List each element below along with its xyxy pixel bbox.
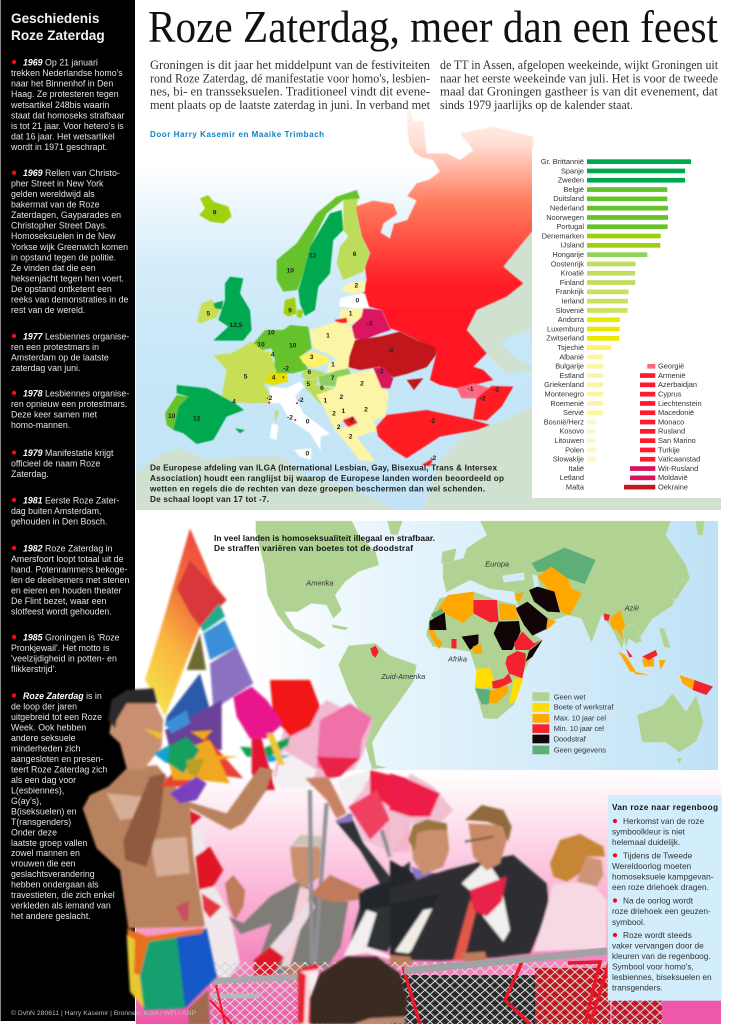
sidebar heading: Roze Zaterdag xyxy=(11,28,105,43)
sidebar: history timeline xyxy=(0,0,135,1021)
country labels left: Italië xyxy=(568,464,584,473)
country scores: 2 xyxy=(339,394,343,401)
country labels left: IJsland xyxy=(561,241,584,250)
timeline entry Roze Zaterdag: andere seksuele xyxy=(11,733,76,743)
timeline entry 1969 Binnenhof xyxy=(10,58,125,152)
country scores: -2 xyxy=(430,455,437,462)
bullet WW2 triangle: Wereldoorlog moeten xyxy=(612,861,692,871)
country labels left: Zwitserland xyxy=(546,334,584,343)
country scores: 3 xyxy=(310,354,314,361)
country scores: 1 xyxy=(326,332,330,339)
continent labels xyxy=(305,560,639,681)
timeline entry Roze Zaterdag: als een dag voor xyxy=(11,775,76,785)
country labels right: Vaticaanstad xyxy=(658,455,700,464)
continent labels: Zuid-Amerika xyxy=(380,672,425,681)
country labels left: Luxemburg xyxy=(547,324,584,333)
timeline entry Roze Zaterdag: geslachtsverandering xyxy=(11,869,95,879)
country scores: -2 xyxy=(493,386,500,393)
timeline entry Roze Zaterdag: G(ay's), xyxy=(11,796,42,806)
timeline entry 1969 Christopher Street: Homoseksuelen in de New xyxy=(11,231,116,241)
country scores: 0 xyxy=(306,418,310,425)
bullet after the war: symbool. xyxy=(612,917,645,927)
panel: Europe map xyxy=(136,107,721,510)
intro text: nes, bi- en transseksuelen. Traditioneel vindt dit evene- xyxy=(150,85,430,99)
country scores xyxy=(168,209,500,462)
timeline entry Roze Zaterdag: L(esbiennes), xyxy=(11,785,64,795)
timeline entry 1982: len de deelnemers met stenen xyxy=(11,575,129,585)
country scores: 10 xyxy=(287,268,294,275)
timeline entry Roze Zaterdag: Onder deze xyxy=(11,827,57,837)
timeline entry Roze Zaterdag: B(iseksuelen) en xyxy=(11,806,77,816)
country labels left: Noorwegen xyxy=(546,213,584,222)
timeline entry Roze Zaterdag: minderheden zich xyxy=(11,743,81,753)
country labels right: Azerbaidjan xyxy=(658,380,697,389)
country scores: 6 xyxy=(307,369,311,376)
timeline entry 1969 Christopher Street: in opstand tegen de politie. xyxy=(11,252,116,262)
photo: rainbow flag xyxy=(145,528,253,750)
timeline entry 1969 Binnenhof: naar het Binnenhof in Den xyxy=(11,79,113,89)
country labels right: Rusland xyxy=(658,427,685,436)
photo background gradient xyxy=(136,772,721,1024)
timeline entry 1978: Deze keer samen met xyxy=(11,410,98,420)
intro text: naar het eerste weekeinde van juli. Het is voor de tweede xyxy=(440,71,718,85)
panel: country ranking bar chart xyxy=(532,147,721,510)
country scores: 5 xyxy=(306,381,310,388)
timeline entry 1979: 1979 Manifestatie krijgt xyxy=(23,448,114,458)
timeline entry 1969 Christopher Street: reeks van demonstraties in de xyxy=(11,294,128,304)
country labels left: Bulgarije xyxy=(555,362,584,371)
bullet rainbow xyxy=(612,930,712,993)
timeline entry 1985: Pronkjewail'. Het motto is xyxy=(11,643,110,653)
bullet origin of pink xyxy=(612,816,705,847)
country scores: 6 xyxy=(353,251,357,258)
timeline entry 1985: 'veelzijdigheid in potten- en xyxy=(11,654,117,664)
world sea background xyxy=(255,521,718,770)
timeline entry 1978 xyxy=(11,388,129,430)
country scores: 10 xyxy=(168,413,176,420)
legend: Max. 10 jaar cel xyxy=(554,714,606,723)
bullet after the war xyxy=(612,896,711,927)
country labels right: Liechtenstein xyxy=(658,399,702,408)
country labels left: Kosovo xyxy=(559,427,584,436)
timeline entry Roze Zaterdag: Week. Ook hebben xyxy=(11,722,86,732)
timeline entry 1969 Binnenhof: wordt in 1971 geschrapt. xyxy=(10,142,107,152)
country scores: -2 xyxy=(266,395,273,402)
bullet rainbow: lesbiennes, biseksuelen en xyxy=(612,972,712,982)
country labels left: Hongarije xyxy=(552,250,584,259)
sidebar heading: Geschiedenis xyxy=(11,11,99,26)
bullet WW2 triangle: een roze driehoek dragen. xyxy=(612,882,709,892)
country labels left: Slowakije xyxy=(553,455,584,464)
country labels left: Ierland xyxy=(561,296,584,306)
country scores: 2 xyxy=(354,283,358,290)
timeline entry 1969 Christopher Street: gelden wereldwijd als xyxy=(11,189,95,199)
world map heading: In veel landen is homoseksualiteit illegaal en strafbaar. xyxy=(214,533,435,543)
country scores: 4 xyxy=(272,374,276,381)
bullet after the war: Na de oorlog wordt xyxy=(623,896,694,906)
country labels left: Bosnië/Herz xyxy=(544,417,584,426)
timeline entry 1979: Zaterdag. xyxy=(11,469,49,479)
country scores: 5 xyxy=(206,311,210,318)
country scores: 12 xyxy=(309,252,317,259)
country scores: 1 xyxy=(341,408,345,415)
country scores: 12,5 xyxy=(230,322,243,329)
country labels right: San Marino xyxy=(658,436,696,445)
intro text xyxy=(150,58,719,112)
timeline entry 1969 Christopher Street: Christopher Street Days. xyxy=(11,221,107,231)
timeline entry 1969 Binnenhof: Haag. Ze protesteren tegen xyxy=(11,89,119,99)
country labels left: Andorra xyxy=(558,315,585,324)
country labels right: Georgië xyxy=(658,362,684,371)
timeline entry 1981: 1981 Eerste Roze Zater- xyxy=(23,495,119,505)
country scores: 4 xyxy=(271,351,275,358)
country labels right: Turkije xyxy=(658,445,680,454)
world map heading: De straffen variëren van boetes tot de doodstraf xyxy=(214,543,413,553)
negative score bars xyxy=(624,364,655,490)
country labels right: Wit-Rusland xyxy=(658,464,698,473)
timeline entry 1969 Binnenhof: trekken Nederlandse homo's xyxy=(11,68,123,78)
country labels left: Zweden xyxy=(558,176,584,185)
timeline entry 1969 Christopher Street xyxy=(11,168,128,315)
country labels left: Frankrijk xyxy=(556,287,584,296)
timeline entry 1978: homo-mannen. xyxy=(11,420,70,430)
country scores: -2 xyxy=(287,414,293,421)
photo: parade bouquets xyxy=(188,680,410,980)
timeline entry 1969 Christopher Street: 1969 Rellen van Christo- xyxy=(23,168,120,178)
timeline entry 1969 Christopher Street: De opstand ontketent een xyxy=(11,284,112,294)
country scores: 10 xyxy=(257,341,265,348)
intro text: sinds 1979 jaarlijks op de kalender staat. xyxy=(440,98,633,112)
timeline entry 1969 Binnenhof: wetsartikel 248bis waarin xyxy=(10,100,109,110)
countries by penalty xyxy=(370,548,713,704)
positive score bars xyxy=(587,159,691,462)
country scores: 12 xyxy=(193,415,201,422)
bullet origin of pink: Herkomst van de roze xyxy=(623,816,705,826)
continent labels: Europa xyxy=(485,560,509,569)
country labels left: Malta xyxy=(566,482,585,492)
timeline entry 1982: De Flint bezet, waar een xyxy=(11,596,106,606)
timeline entry 1977: zaterdag van juni. xyxy=(11,363,80,373)
timeline entry 1969 Christopher Street: rest van de wereld. xyxy=(11,305,85,315)
country scores: 2 xyxy=(337,424,341,431)
photo: man with rainbow flag and feather bouquet xyxy=(83,688,273,1024)
photo: fence with net and ribbons xyxy=(210,951,721,1024)
legend: Min. 10 jaar cel xyxy=(554,724,604,733)
timeline entry Roze Zaterdag: verkleden als iemand van xyxy=(11,901,111,911)
credits footer: © DvhN 280611 | Harry Kasemir | Bronnen: ILGA / WFI / ANP xyxy=(11,1009,196,1017)
panel heading: Van roze naar regenboog xyxy=(612,803,718,812)
timeline entry 1978: 1978 Lesbiennes organise- xyxy=(23,388,129,398)
timeline entry Roze Zaterdag: aangesloten en presen- xyxy=(11,754,104,764)
country labels left: Spanje xyxy=(561,166,584,175)
country scores: 9 xyxy=(288,307,292,314)
bullet WW2 triangle: Tijdens de Tweede xyxy=(623,850,693,860)
country labels left: Tsjechië xyxy=(557,343,584,352)
country scores: 1 xyxy=(323,398,327,405)
Europe map caption: Association) houdt een ranglijst bij waarop de Europese landen worden beoordeeld op xyxy=(150,474,504,483)
timeline entry 1979: officieel de naam Roze xyxy=(11,458,100,468)
timeline entry 1977 xyxy=(11,332,129,373)
byline: Door Harry Kasemir en Maaike Trimbach xyxy=(150,130,324,139)
continent labels: Amerika xyxy=(305,578,333,587)
timeline entry Roze Zaterdag: vrouwen die een xyxy=(11,859,76,869)
timeline entry 1981: dag buiten Amsterdam, xyxy=(11,506,101,516)
bullet rainbow: vaker vervangen door de xyxy=(612,941,704,951)
Europe map caption: De Europese afdeling van ILGA (International Lesbian, Gay, Bisexual, Trans & Intersex xyxy=(150,464,497,472)
country scores: 10 xyxy=(267,329,275,336)
continent labels: Azië xyxy=(624,603,639,612)
country labels left: Servië xyxy=(563,408,584,417)
intro text: Groningen is dit jaar het middelpunt van de festiviteiten xyxy=(150,58,430,72)
timeline entry 1981: gehouden in Den Bosch. xyxy=(11,516,107,526)
country labels right: Cyprus xyxy=(658,390,682,398)
timeline entry 1981 xyxy=(11,495,119,526)
timeline entry 1982: en eieren en houden theater xyxy=(11,586,122,596)
timeline entry 1982 xyxy=(11,543,129,616)
timeline entry 1985: 1985 Groningen is 'Roze xyxy=(23,632,120,642)
timeline entry 1985 xyxy=(11,632,120,674)
legend: Boete of werkstraf xyxy=(554,703,614,712)
timeline entry Roze Zaterdag: travestieten, die zich enkel xyxy=(11,890,115,900)
world map heading xyxy=(214,533,435,553)
country labels left: Duitsland xyxy=(553,194,584,203)
map of Europe with scores xyxy=(136,107,533,510)
timeline entry 1969 Binnenhof: dat 16 jaar. Het wetsartikel xyxy=(11,132,115,142)
country scores: 2 xyxy=(360,381,364,388)
intro text: de TT in Assen, afgelopen weekeinde, wijkt Groningen uit xyxy=(440,58,719,72)
timeline entry 1969 Christopher Street: Zaterdagen, Gayparades en xyxy=(11,210,121,220)
intro text: ment plaats op de laatste zaterdag in juni. In verband met xyxy=(150,98,431,112)
country labels left: Finland xyxy=(560,278,584,287)
bullet rainbow: Roze wordt steeds xyxy=(623,930,692,940)
country labels left: Slovenië xyxy=(556,306,584,315)
timeline entry 1977: ren een protestmars in xyxy=(11,342,99,352)
timeline entry Roze Zaterdag: uitgebreid tot een Roze xyxy=(11,712,102,722)
country scores: 10 xyxy=(289,343,297,350)
country labels left: Estland xyxy=(559,371,584,380)
country labels left: Gr. Brittannië xyxy=(541,157,584,166)
timeline entry Roze Zaterdag: hebben ondergaan als xyxy=(11,880,99,890)
country labels left: Litouwen xyxy=(554,436,584,445)
legend: Geen gegevens xyxy=(554,745,606,754)
country labels left: Denemarken xyxy=(542,231,584,240)
country scores: 6 xyxy=(320,385,324,392)
timeline entry 1969 Christopher Street: heksenjacht tegen hen voert. xyxy=(11,273,124,283)
panel: Van roze naar regenboog xyxy=(608,795,722,1001)
bullet WW2 triangle xyxy=(612,850,714,892)
timeline entry 1969 Binnenhof: staat dat homoseks strafbaar xyxy=(11,110,125,120)
intro text: maal dat Groningen gastheer is van dit evenement, dat xyxy=(440,85,719,99)
bullet rainbow: kleuren van de regenboog. xyxy=(612,951,711,961)
timeline entry 1982: slotfeest wordt gehouden. xyxy=(11,606,112,616)
timeline entry 1969 Christopher Street: Ze vinden dat die een xyxy=(11,263,96,273)
timeline entry Roze Zaterdag: T(ransgenders) xyxy=(11,817,71,827)
country scores: 0 xyxy=(355,297,359,304)
country labels left: Oostenrijk xyxy=(551,259,584,268)
country labels left: Kroatië xyxy=(561,269,584,278)
sidebar heading xyxy=(11,11,105,43)
country scores: -2 xyxy=(348,417,354,424)
country labels left: Montenegro xyxy=(545,390,584,398)
timeline entry 1982: hand. Potenrammers bekoge- xyxy=(11,564,127,574)
timeline entry 1969 Binnenhof: is tot 21 jaar. Voor hetero's is xyxy=(11,121,124,131)
country scores: 7 xyxy=(331,375,335,382)
country labels right: Macedonië xyxy=(658,408,694,417)
country labels left: Portugal xyxy=(556,222,584,231)
country labels left: Griekenland xyxy=(544,380,584,389)
intro text: rond Roze Zaterdag, dé manifestatie voor homo's, lesbien- xyxy=(150,71,430,85)
country scores: 2 xyxy=(332,410,336,417)
photo: older man in grey suit xyxy=(225,835,348,983)
sea background xyxy=(136,150,721,510)
country scores: -3 xyxy=(367,320,373,327)
photo: foreground head xyxy=(298,957,407,1024)
country scores: -1 xyxy=(468,386,474,393)
timeline entry 1979 xyxy=(11,448,114,479)
timeline entry Roze Zaterdag: Roze Zaterdag is in xyxy=(23,691,102,701)
legend: Geen wet xyxy=(554,692,585,701)
timeline entry 1977: 1977 Lesbiennes organise- xyxy=(23,332,129,342)
country labels left: Polen xyxy=(565,445,584,454)
Europe map caption: wetten en regels die de rechten van deze groepen beschermen dan wel schenden. xyxy=(149,484,485,494)
country labels right: Monaco xyxy=(658,417,684,426)
photo: poles and arms xyxy=(305,777,410,963)
country scores: 2 xyxy=(364,407,368,414)
Europe map caption xyxy=(149,464,504,504)
country scores: 4 xyxy=(232,398,236,405)
photo: man in dark jacket and man with glasses behind xyxy=(390,773,607,968)
country scores: 9 xyxy=(213,209,217,216)
legend: Doodstraf xyxy=(554,734,587,743)
country scores: 1 xyxy=(331,361,335,368)
panel: world map of criminalisation xyxy=(214,521,718,770)
continent labels: Afrika xyxy=(447,655,467,664)
bullet rainbow: Symbool voor homo's, xyxy=(612,962,694,972)
country labels left: Albanië xyxy=(559,352,584,361)
bullet WW2 triangle: homoseksuele kampgevan- xyxy=(612,872,714,882)
country scores: -2 xyxy=(283,365,289,372)
legend xyxy=(532,692,614,754)
timeline entry 1985: flikkerstrijd'. xyxy=(11,664,57,674)
country labels left: België xyxy=(563,185,584,194)
timeline entry 1969 Christopher Street: pher Street in New York xyxy=(11,178,104,188)
bullet after the war: roze driehoek een geuzen- xyxy=(612,906,711,916)
timeline entry 1982: Amersfoort loopt totaal uit de xyxy=(11,554,124,564)
country labels right: Moldavië xyxy=(658,473,688,482)
timeline entry Roze Zaterdag: teert Roze Zaterdag zich xyxy=(11,764,107,774)
Europe map caption: De schaal loopt van 17 tot -7. xyxy=(150,495,269,504)
timeline entry 1969 Christopher Street: Yorkse wijk Greenwich komen xyxy=(11,242,128,252)
timeline entry Roze Zaterdag: laatste groep vallen xyxy=(11,838,87,848)
country scores: -2 xyxy=(480,396,486,403)
bullet origin of pink: helemaal duidelijk. xyxy=(612,837,680,847)
timeline entry 1982: 1982 Roze Zaterdag in xyxy=(23,543,113,553)
bullet origin of pink: symboolkleur is niet xyxy=(612,826,686,836)
timeline entry Roze Zaterdag: de loop der jaren xyxy=(11,702,77,712)
timeline entry 1978: ren opnieuw een protestmars. xyxy=(11,399,127,409)
country labels left: Roemenië xyxy=(550,399,584,408)
country scores: 5 xyxy=(244,373,248,380)
country labels left: Letland xyxy=(560,473,584,482)
world map xyxy=(256,521,713,769)
country scores: -2 xyxy=(298,397,304,404)
timeline entry 1977: Amsterdam op de laatste xyxy=(11,353,109,363)
country labels right xyxy=(658,362,702,492)
timeline entry 1969 Christopher Street: bakermat van de Roze xyxy=(11,200,100,210)
timeline entry 1969 Binnenhof: 1969 Op 21 januari xyxy=(23,58,98,68)
timeline entry Roze Zaterdag xyxy=(11,691,115,921)
country scores: -3 xyxy=(378,368,384,375)
country scores: 0 xyxy=(305,450,309,457)
bullet rainbow: transgenders. xyxy=(612,983,663,993)
timeline entry Roze Zaterdag: het andere geslacht. xyxy=(11,911,91,921)
country labels right: Oekraine xyxy=(658,482,688,492)
country labels right: Armenië xyxy=(658,371,686,380)
timeline entry Roze Zaterdag: zowel mannen en xyxy=(11,848,80,858)
country scores: -4 xyxy=(387,348,394,355)
country scores: 2 xyxy=(349,434,353,441)
country labels left xyxy=(541,157,585,492)
country scores: -2 xyxy=(429,418,436,425)
country scores: 1 xyxy=(349,311,353,318)
country labels left: Nederland xyxy=(550,204,584,212)
